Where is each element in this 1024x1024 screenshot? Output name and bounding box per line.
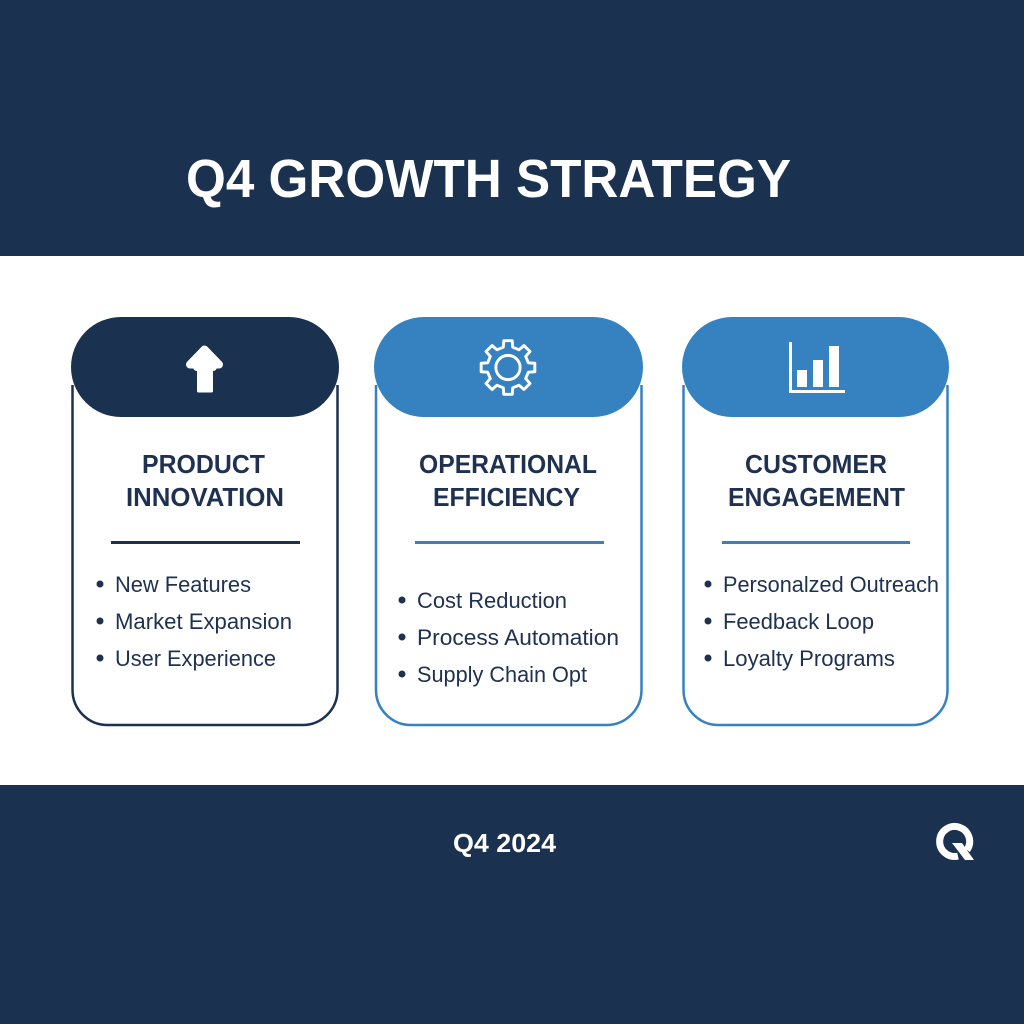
bullet list: Loyalty Programs (723, 646, 895, 671)
bullet list (398, 588, 619, 687)
heading: product innovation: PRODUCT (142, 449, 265, 479)
card header (682, 317, 949, 417)
panel: customer engagement (682, 317, 949, 725)
heading: product innovation (126, 449, 284, 512)
bullet list: Supply Chain Opt (417, 662, 587, 687)
heading: operational efficiency (419, 449, 597, 512)
bullet list (96, 572, 292, 671)
card outline (72, 385, 338, 725)
bullet list: New Features (115, 572, 251, 597)
bullet list: Process Automation (417, 625, 619, 650)
bullet list: Personalzed Outreach (723, 572, 939, 597)
panel: operational efficiency (374, 317, 643, 725)
panel: product innovation (71, 317, 339, 725)
footer band (0, 785, 1024, 1024)
footer date: Q4 2024 (453, 828, 557, 858)
heading: customer engagement: ENGAGEMENT (728, 482, 905, 512)
heading: customer engagement (728, 449, 905, 512)
card outline (376, 385, 642, 725)
title: Q4 GROWTH STRATEGY (186, 149, 791, 209)
card header (71, 317, 339, 417)
icon: up arrow (190, 350, 219, 392)
heading: product innovation: INNOVATION (126, 482, 284, 512)
bullet list: Market Expansion (115, 609, 292, 634)
card header (374, 317, 643, 417)
card outline (684, 385, 948, 725)
bullet list: User Experience (115, 646, 276, 671)
icon: gear (481, 341, 535, 394)
bullet list: Cost Reduction (417, 588, 567, 613)
bullet list: Feedback Loop (723, 609, 874, 634)
bullet list (704, 572, 939, 671)
header band (0, 0, 1024, 256)
heading: customer engagement: CUSTOMER (745, 449, 887, 479)
heading: operational efficiency: OPERATIONAL (419, 449, 597, 479)
icon: Q logo (940, 826, 974, 860)
heading: operational efficiency: EFFICIENCY (433, 482, 580, 512)
icon: bar chart (789, 342, 845, 393)
